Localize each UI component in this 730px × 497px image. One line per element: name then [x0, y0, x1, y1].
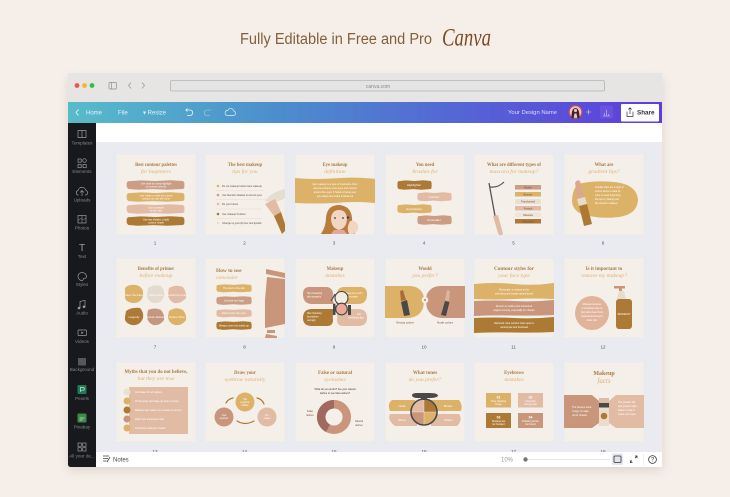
card 13: Concealer for all regions [135, 391, 163, 394]
card 11: Contour styles for [494, 266, 535, 272]
all your designs item [69, 443, 95, 458]
card 9 [295, 258, 375, 338]
card 11: narrow jaw and forehead [500, 326, 528, 329]
elements item: Elements [72, 169, 92, 174]
card 13: but they are true [138, 376, 175, 382]
card 18: facts [597, 377, 611, 385]
card 8: Always cover red marks up [219, 324, 250, 328]
card 11: Round: an outline and contoured [496, 305, 533, 308]
card 13: Oversized makeup is better [135, 427, 166, 430]
notes icon [103, 456, 110, 462]
card 16 [385, 362, 465, 442]
card 12: Makeup remover [583, 303, 602, 306]
background item: Background [70, 367, 95, 372]
card 2: tips for you [232, 168, 258, 175]
card 17: Eyebrows [504, 371, 524, 376]
card 6: gradient lips? [588, 169, 620, 175]
card 17 [474, 362, 554, 442]
styles item: Styles [76, 282, 89, 287]
page numbers: 6 [602, 240, 605, 246]
toolbar menu: Home [86, 110, 103, 116]
card 18: The powder full [618, 401, 636, 404]
page numbers: 17 [511, 449, 516, 454]
pexels item [75, 385, 90, 401]
card 9: Using too much [345, 292, 363, 295]
card 12: is important due to [582, 307, 603, 310]
page numbers: 15 [331, 449, 337, 454]
page numbers: 16 [421, 449, 427, 454]
card 7: Save Your Face [125, 294, 143, 297]
videos item: Videos [75, 339, 90, 344]
card 2: Use makeup brushes [222, 213, 246, 216]
card 15: What do you prefer? Are your natural [314, 388, 356, 391]
card 17: Drawing brows [522, 420, 540, 423]
card 2 [205, 154, 285, 235]
card 1 [116, 154, 196, 235]
card 1: for fair skin [150, 210, 163, 212]
card 5: Volumized [522, 220, 534, 223]
page numbers [152, 240, 606, 454]
white ruler band [96, 123, 662, 142]
card 4: Eyeshadow [406, 207, 423, 211]
card 8: The best to the skin [223, 287, 246, 290]
card 5: Mascara [523, 214, 533, 217]
back chevron [76, 110, 78, 116]
zoom slider [523, 457, 610, 462]
card 2: Do your brows [222, 203, 239, 206]
card 4: Concealer [427, 218, 441, 222]
card 9: skin properly [307, 296, 322, 298]
left sidebar [68, 123, 96, 467]
card 14: Do [265, 414, 269, 417]
card 6: color is used beginning [595, 194, 621, 197]
card 18 [564, 362, 644, 442]
card 3: used to enhance your eyes and contour [313, 187, 357, 190]
card 17: mistakes [504, 377, 524, 383]
card 11: soft lining and create natural tones [495, 292, 534, 296]
canva toolbar [68, 102, 662, 124]
card 7: Benefits of primer [138, 267, 174, 272]
card 1: Use two shades: a light [143, 218, 169, 222]
card 18: 'rouge' is make [572, 410, 589, 413]
toolbar menu [86, 110, 167, 116]
card 15: Natural [355, 420, 363, 423]
card 14: Top [243, 398, 248, 401]
card 3: Eye makeup [323, 163, 348, 168]
card 14: Draw your [234, 371, 256, 376]
card 4: brushes for [412, 168, 438, 175]
share button: Share [637, 110, 655, 116]
card 12: Is it important to [586, 267, 623, 272]
card 7: before makeup [140, 272, 173, 279]
card 14: outline [241, 404, 249, 407]
card 9: exfoliating lips [348, 316, 364, 320]
fullscreen icon [630, 456, 637, 462]
card 14: Use [222, 414, 227, 417]
share button [621, 104, 659, 122]
templates item [72, 130, 93, 146]
card 9: wrongly [307, 319, 316, 322]
card 17: wrong color [524, 403, 537, 406]
photos item [75, 216, 90, 230]
card 6: What are [595, 163, 613, 168]
card 7: Reduce Shine [169, 316, 185, 319]
card 4: You need [416, 163, 435, 168]
help icon [649, 456, 656, 464]
templates item: Templates [72, 140, 93, 146]
card 16: Brown [444, 404, 453, 408]
notes bottom bar [96, 452, 662, 467]
page numbers: 18 [600, 449, 606, 454]
card 7: Smooth Out Lines [167, 294, 188, 297]
card 13: Myths that you do not believe, [124, 370, 188, 375]
card 18: make your eyes [618, 413, 636, 416]
sidebar toggle icon [109, 82, 116, 89]
card 18: up for cheeks [572, 414, 588, 417]
page numbers: 4 [423, 240, 426, 246]
card 10 [385, 258, 465, 338]
page numbers: 1 [154, 240, 157, 246]
card 1: Use nude for deep highlight [141, 182, 172, 186]
card 1: Use a powder [148, 206, 164, 210]
card 6: Gradient lips are a type of [595, 186, 624, 189]
card 5: Bronzer [524, 193, 533, 196]
toolbar menu: File [118, 110, 128, 116]
card 5: What are different types of [487, 163, 541, 168]
card 9: Not [357, 313, 361, 316]
card 9: Makeup [327, 267, 344, 272]
card 9: foundation [307, 316, 319, 318]
card 5: Frosted [524, 207, 533, 210]
card 15: lashes [306, 414, 314, 417]
card 2: Do not makeup before face makeup [222, 185, 262, 188]
card 13: Makeup age makes eye contact in person [135, 409, 182, 412]
card 1: contour shade [148, 222, 165, 224]
card 7: Longevity [129, 316, 140, 319]
elements item [72, 159, 92, 174]
card 6: the center's makeup [595, 202, 618, 205]
card 11: your face type [497, 272, 530, 279]
heading [240, 24, 491, 52]
card 3: definition [324, 168, 346, 175]
design name: Your Design Name [508, 110, 558, 116]
avatar [568, 105, 582, 119]
address bar: canva.com [366, 84, 390, 90]
card 17: Drawing too [492, 420, 506, 423]
page numbers: 7 [154, 344, 157, 350]
card 9: Not preparing [307, 292, 323, 295]
card 12: help skin clean from [581, 311, 603, 314]
card 3: around the eyes. It helps to frame your [314, 191, 357, 194]
heading: Fully Editable in Free and Pro [240, 31, 432, 48]
card 6 [564, 154, 644, 235]
card 8 [205, 258, 285, 338]
window shadow [68, 78, 662, 470]
card 4: Highlighter [407, 183, 421, 187]
page numbers: 12 [600, 344, 606, 350]
card 18: The famous word [572, 406, 592, 409]
help icon: ? [651, 458, 655, 464]
card 2: The best makeup [228, 163, 263, 168]
card 16: Nude [398, 404, 406, 408]
plus [586, 110, 591, 114]
card 3: eye shape and make it stand out [317, 195, 353, 198]
page numbers: 14 [242, 449, 247, 454]
card 1: Use cream or stick for a deep [140, 194, 173, 198]
page numbers: 2 [243, 240, 246, 246]
page numbers: 9 [333, 344, 336, 350]
card 2: Use blemish shadow to accent eyes [222, 194, 263, 197]
card 7 [116, 258, 196, 338]
card 11 [474, 258, 554, 338]
card 16: Yellow [444, 418, 453, 422]
card 11: Rectangle: a contour to the [499, 288, 530, 292]
card 7: Hides Pores [149, 294, 164, 297]
card 14: eyeliner [220, 417, 229, 420]
card 16: What tones [413, 371, 437, 376]
videos item [75, 330, 90, 344]
browser window chrome [68, 73, 662, 103]
card 13 [116, 362, 196, 442]
card 11: Diamond: face contour have upon a [494, 322, 534, 325]
card 17: Over plucking [491, 400, 507, 403]
uploads item: Uploads [74, 198, 91, 202]
card 10: Would [418, 267, 432, 272]
card 2: Change up your lip liner and lipstick [222, 222, 262, 225]
zoom percent: 10% [501, 458, 514, 464]
traffic lights [75, 83, 94, 88]
card 14: eyebrow [240, 401, 250, 404]
card 12 [564, 258, 644, 338]
text item: T [79, 243, 85, 254]
card 17: too harsh [525, 423, 536, 426]
notes label: Notes [113, 458, 129, 464]
nav arrows [128, 82, 144, 88]
card 10: Nude colors [437, 320, 454, 324]
card 5: Transformed [521, 200, 536, 204]
card 9: Not choosing [307, 312, 322, 315]
card 18: and purple make [618, 405, 637, 408]
heading: Canva [442, 24, 491, 52]
card 17: far forward [493, 423, 505, 426]
card 18: black or how to [618, 409, 635, 412]
cloud saved icon [225, 109, 235, 116]
insights icon [600, 106, 613, 118]
card 12: bacteria and keep it [581, 315, 603, 318]
card 1: contour on cool skin tone [142, 198, 171, 200]
card 17: 04 [529, 416, 532, 420]
page numbers: 8 [243, 344, 246, 350]
grid view button [612, 454, 623, 465]
pixabay item [74, 414, 91, 430]
page numbers: 11 [511, 344, 516, 350]
card 18: Makeup [593, 371, 615, 377]
text item [78, 243, 87, 259]
card 1: on contour cheeks [146, 186, 167, 188]
card 8: concealer [216, 275, 239, 281]
card 16: do you prefer? [409, 376, 442, 383]
card 13: Won't ruin someone's skin [135, 418, 165, 421]
page numbers: 13 [152, 449, 158, 454]
card 15: False or natural [318, 371, 353, 376]
card 8: How to use [216, 268, 242, 274]
pexels item: Pexels [75, 396, 90, 401]
card 12: MAKEUP [618, 312, 630, 316]
card 10: you prefer? [411, 272, 438, 279]
card 16: Rose [398, 418, 406, 422]
card 15: lashes or use false lashes? [320, 392, 351, 395]
card 15 [295, 362, 375, 442]
page numbers: 3 [333, 240, 336, 246]
card 1: Best contour palettes [135, 163, 177, 168]
audio item [76, 300, 88, 316]
card 17: brows [495, 403, 503, 406]
undo redo [186, 108, 211, 116]
uploads item [74, 187, 91, 202]
card 7: Reduce Redness [146, 316, 166, 319]
canvas area [96, 142, 662, 453]
card 10: Strong colors [396, 320, 414, 324]
card 8: Blend under the eyes [222, 312, 247, 315]
pixabay item: Pixabay [74, 424, 91, 430]
audio item: Audio [76, 310, 88, 316]
text item: Text [78, 254, 87, 259]
card 3: Eye makeup is a type of cosmetics often [313, 183, 358, 186]
card 14 [205, 362, 285, 442]
template pages [116, 154, 644, 454]
card 4: Contour [429, 195, 439, 199]
card 6: the lips by fading over [595, 198, 619, 201]
page numbers: 5 [512, 240, 515, 246]
card 12: clear skin [587, 319, 598, 322]
all your designs item: All your de... [69, 454, 95, 458]
card 17: Using the [525, 400, 536, 403]
address bar [170, 80, 604, 91]
card 17: 03 [497, 416, 500, 420]
card 5 [474, 154, 554, 235]
card 1: for beginners [141, 168, 171, 175]
toolbar menu: ▾ Resize [143, 110, 167, 116]
card 9: mistakes [325, 273, 345, 279]
card 12: remove my makeup? [581, 273, 627, 279]
card 13: Throw away old make-up when a clean [135, 400, 179, 403]
styles item [76, 272, 89, 287]
card 5: mascara for makeup? [490, 168, 539, 175]
background item [70, 358, 95, 372]
card 3 [295, 154, 375, 235]
photos item: Photos [75, 226, 90, 230]
card 5: Blushy [524, 186, 532, 189]
card 6: ombre where a dark lip [595, 190, 621, 193]
card 15: eyelashes [324, 377, 346, 383]
card 15: False [307, 410, 314, 413]
card 17: 02 [529, 396, 532, 400]
card 14: eyebrow naturally [225, 377, 266, 383]
card 15: lashes [355, 424, 363, 427]
card 9: concealer [347, 296, 358, 298]
page numbers: 10 [421, 344, 427, 350]
card 8: Conceal eye bags [224, 300, 245, 302]
card 14: shape [264, 417, 271, 420]
card 4 [385, 154, 465, 235]
card 17: 01 [497, 396, 500, 400]
card 11: angles running, especially for cheeks [494, 309, 535, 312]
